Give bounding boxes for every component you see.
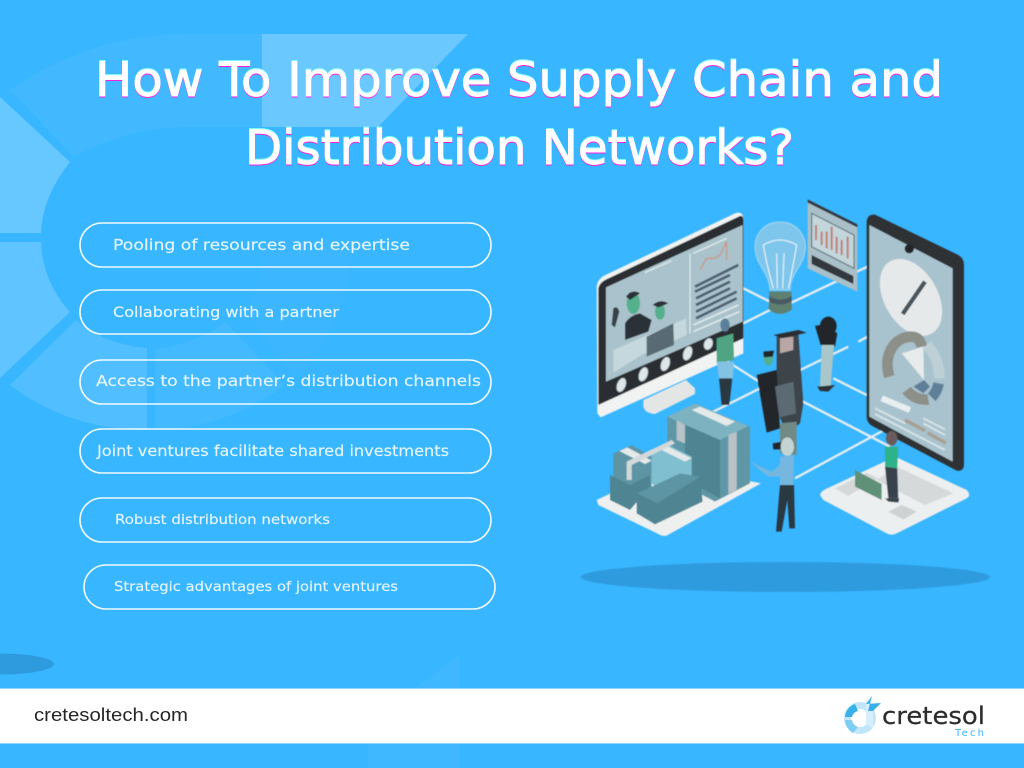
pill: pooling of resources: Pooling of resources and expertise (113, 236, 410, 254)
pill: pooling of resources (80, 223, 491, 267)
small chart panel (808, 199, 857, 292)
list of pills (80, 223, 495, 609)
light bulb (755, 222, 805, 314)
tablet (867, 215, 964, 471)
pill: collaborating (80, 290, 491, 334)
title: How To Improve Supply Chain and (95, 53, 943, 108)
pill: strategic advantages: Strategic advantages of joint ventures (114, 579, 398, 595)
packages (597, 403, 761, 536)
pill: strategic advantages (84, 565, 495, 609)
title: Distribution Networks? (245, 121, 794, 176)
pill: distribution channels (80, 360, 491, 404)
connector lines (677, 247, 908, 478)
white dial (867, 248, 955, 347)
monitor (597, 213, 743, 417)
pill: robust networks: Robust distribution networks (115, 512, 330, 528)
left shadow ellipse (0, 654, 54, 674)
tablet text rows (875, 398, 946, 450)
pill: joint ventures: Joint ventures facilitate shared investments (96, 442, 449, 460)
person: woman phone (815, 317, 837, 392)
illustration: supply chain network (581, 199, 990, 592)
watermark logo (0, 34, 468, 768)
person: blue shirt (750, 437, 795, 532)
pill: joint ventures (80, 429, 491, 473)
person: centre stack (757, 330, 807, 455)
people group (717, 317, 899, 532)
footer website: cretesoltech.com (34, 705, 188, 725)
footer bar (0, 688, 1024, 744)
logo: cretesol tech (845, 696, 985, 739)
person: green shirt man (717, 318, 734, 405)
pill: collaborating: Collaborating with a partner (113, 305, 339, 321)
logo wordmark: cretesol (882, 702, 985, 730)
person: green top on laptop (885, 431, 899, 503)
pill: robust networks (80, 498, 491, 542)
title (95, 53, 943, 176)
logo tagline: Tech (954, 728, 984, 739)
laptop (820, 457, 969, 535)
donut chart (887, 337, 939, 400)
ground shadow (581, 562, 990, 592)
pill: distribution channels: Access to the partner’s distribution channels (96, 372, 481, 390)
logo mark (845, 696, 881, 733)
